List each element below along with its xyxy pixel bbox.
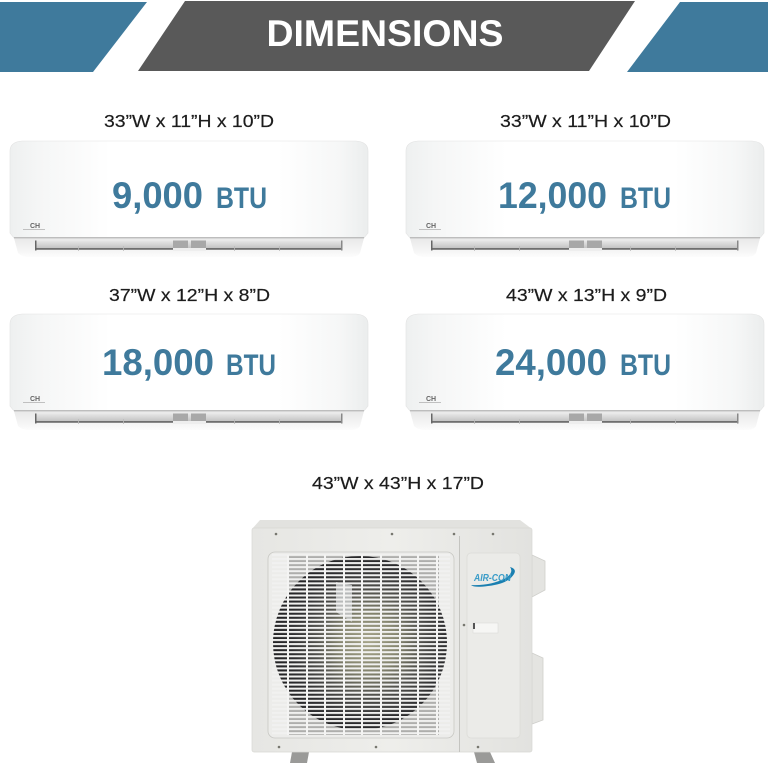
icon: AIR-CON logo: AIR-CON [473, 573, 512, 584]
capacity: 18,000 [102, 342, 214, 383]
panel divider [459, 536, 460, 752]
left blue band [0, 2, 147, 72]
title background [138, 1, 635, 71]
right blue band [627, 2, 768, 72]
panel: 24,000 BTU indoor unit [406, 285, 764, 430]
fan [273, 556, 447, 730]
service panel [467, 553, 520, 738]
panel: outdoor condenser unit [252, 520, 545, 763]
dimension label: 43”W x 13”H x 9”D [506, 285, 667, 305]
unit BTU: BTU [216, 182, 267, 215]
feet [290, 752, 495, 763]
indoor unit illustration [10, 314, 368, 430]
panel: 18,000 BTU indoor unit [10, 285, 368, 430]
capacity: 12,000 [498, 175, 607, 216]
indoor unit illustration [406, 314, 764, 430]
screws [275, 533, 494, 748]
unit BTU: BTU [620, 182, 671, 215]
fan blade highlight [336, 582, 352, 622]
fan grille [268, 552, 454, 738]
cabinet [252, 528, 532, 752]
capacity: 9,000 [112, 175, 203, 216]
vertical wires [287, 555, 438, 735]
icon: AIR-CON logo [471, 567, 515, 587]
dimension label: 33”W x 11”H x 10”D [104, 111, 274, 131]
panel: 12,000 BTU indoor unit [406, 111, 764, 257]
dimension label: 33”W x 11”H x 10”D [500, 111, 671, 131]
header banner [0, 1, 768, 72]
indoor unit illustration [406, 141, 764, 257]
dimension label: 37”W x 12”H x 8”D [109, 285, 270, 305]
horizontal wires [272, 554, 450, 736]
title: DIMENSIONS [266, 13, 504, 54]
wire shadow backing [287, 555, 439, 735]
outdoor unit dimension label: 43”W x 43”H x 17”D [312, 473, 484, 493]
indoor unit illustration [10, 141, 368, 257]
handle [473, 623, 498, 633]
side connectors [532, 555, 545, 724]
top lid [252, 520, 532, 529]
capacity: 24,000 [495, 342, 607, 383]
unit BTU: BTU [226, 349, 276, 382]
panel: 9,000 BTU indoor unit [10, 111, 368, 257]
unit BTU: BTU [620, 349, 671, 382]
